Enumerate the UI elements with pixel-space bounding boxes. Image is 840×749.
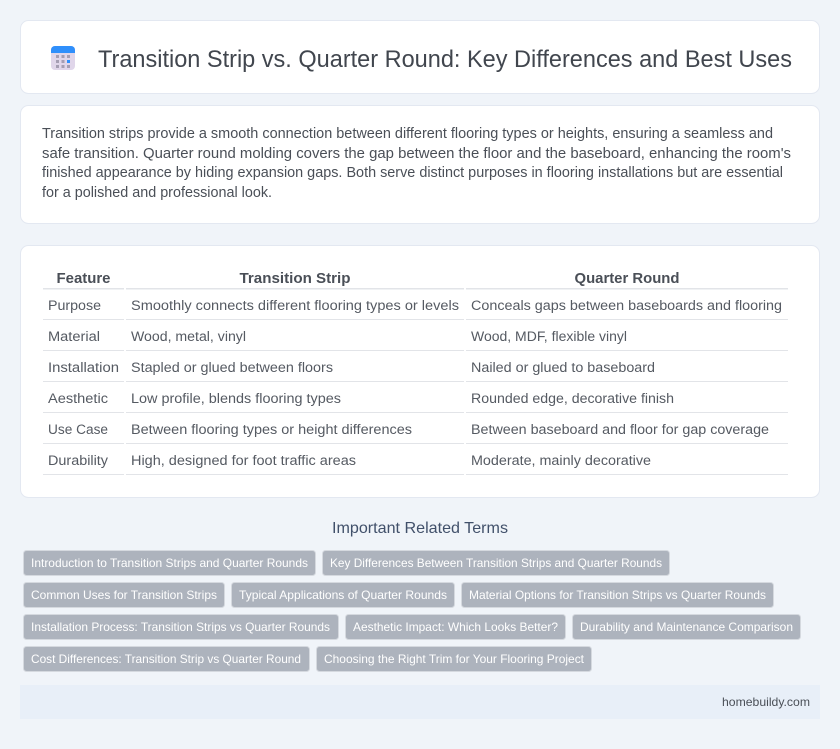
panel: comparison table [20,246,820,498]
table row: installation: Stapled or glued between floors [131,360,333,376]
text block: introduction paragraph: finished appearance by hiding expansion gaps. Both serve distinct purposes in flooring installations but are essential [42,165,783,181]
related terms chips [24,550,800,672]
table header: Feature [56,270,110,287]
table row: purpose: Purpose [48,298,101,314]
related terms chips: Aesthetic Impact: Which Looks Better? [353,620,558,634]
title: Transition Strip vs. Quarter Round: Key Differences and Best Uses [98,46,792,73]
related terms chips: Introduction to Transition Strips and Quarter Rounds [31,556,308,570]
panel: title header [20,20,820,94]
text block: introduction paragraph: Transition strips provide a smooth connection between different flooring types or heights, ensuring a seamless and [42,126,773,142]
icon: calendar [51,46,75,70]
table row: use case [48,422,769,438]
table header: Transition Strip [240,270,350,287]
related terms chips: Material Options for Transition Strips vs Quarter Rounds [469,588,766,602]
related terms chips: Key Differences Between Transition Strips and Quarter Rounds [330,556,662,570]
table row: material: Wood, MDF, flexible vinyl [471,329,627,345]
related terms chips: Installation Process: Transition Strips vs Quarter Rounds [31,620,330,634]
related terms chips: Common Uses for Transition Strips [31,588,217,602]
table header [56,270,680,287]
table row: use case: Between baseboard and floor for gap coverage [471,422,769,438]
table row: durability: High, designed for foot traffic areas [131,453,356,469]
table row: purpose: Conceals gaps between baseboards and flooring [471,298,782,314]
table row: durability: Durability [48,453,109,469]
table row: material: Wood, metal, vinyl [131,329,246,345]
table row: durability [48,453,651,469]
table row: installation [48,360,655,376]
table row: use case: Between flooring types or height differences [131,422,412,438]
table row: aesthetic [48,391,674,407]
heading: important related terms: Important Related Terms [332,520,508,537]
table row: aesthetic: Aesthetic [48,391,108,407]
related terms chips: Typical Applications of Quarter Rounds [239,588,447,602]
table row: durability: Moderate, mainly decorative [471,453,651,469]
related terms chips: Cost Differences: Transition Strip vs Quarter Round [31,652,301,666]
table row: purpose [48,298,782,314]
table header: Quarter Round [574,270,680,287]
table row: material: Material [48,329,100,345]
table row: material [48,329,627,345]
table row: aesthetic: Low profile, blends flooring types [131,391,341,407]
panel: introduction [20,106,820,224]
table row: use case: Use Case [48,422,108,438]
related terms chips: Choosing the Right Trim for Your Flooring Project [324,652,585,666]
table row: installation: Installation [48,360,119,376]
related terms chips: Durability and Maintenance Comparison [580,620,793,634]
text block: introduction paragraph: safe transition. Quarter round molding covers the gap between the floor and the baseboard, enhancing the room's [42,146,791,162]
table row: purpose: Smoothly connects different flooring types or levels [131,298,459,314]
table row: installation: Nailed or glued to baseboard [471,360,655,376]
footer source text: homebuildy.com [722,695,810,709]
text block: introduction paragraph [42,126,791,201]
footer [20,685,820,719]
table row: aesthetic: Rounded edge, decorative finish [471,391,674,407]
text block: introduction paragraph: for a polished and professional look. [42,185,272,201]
